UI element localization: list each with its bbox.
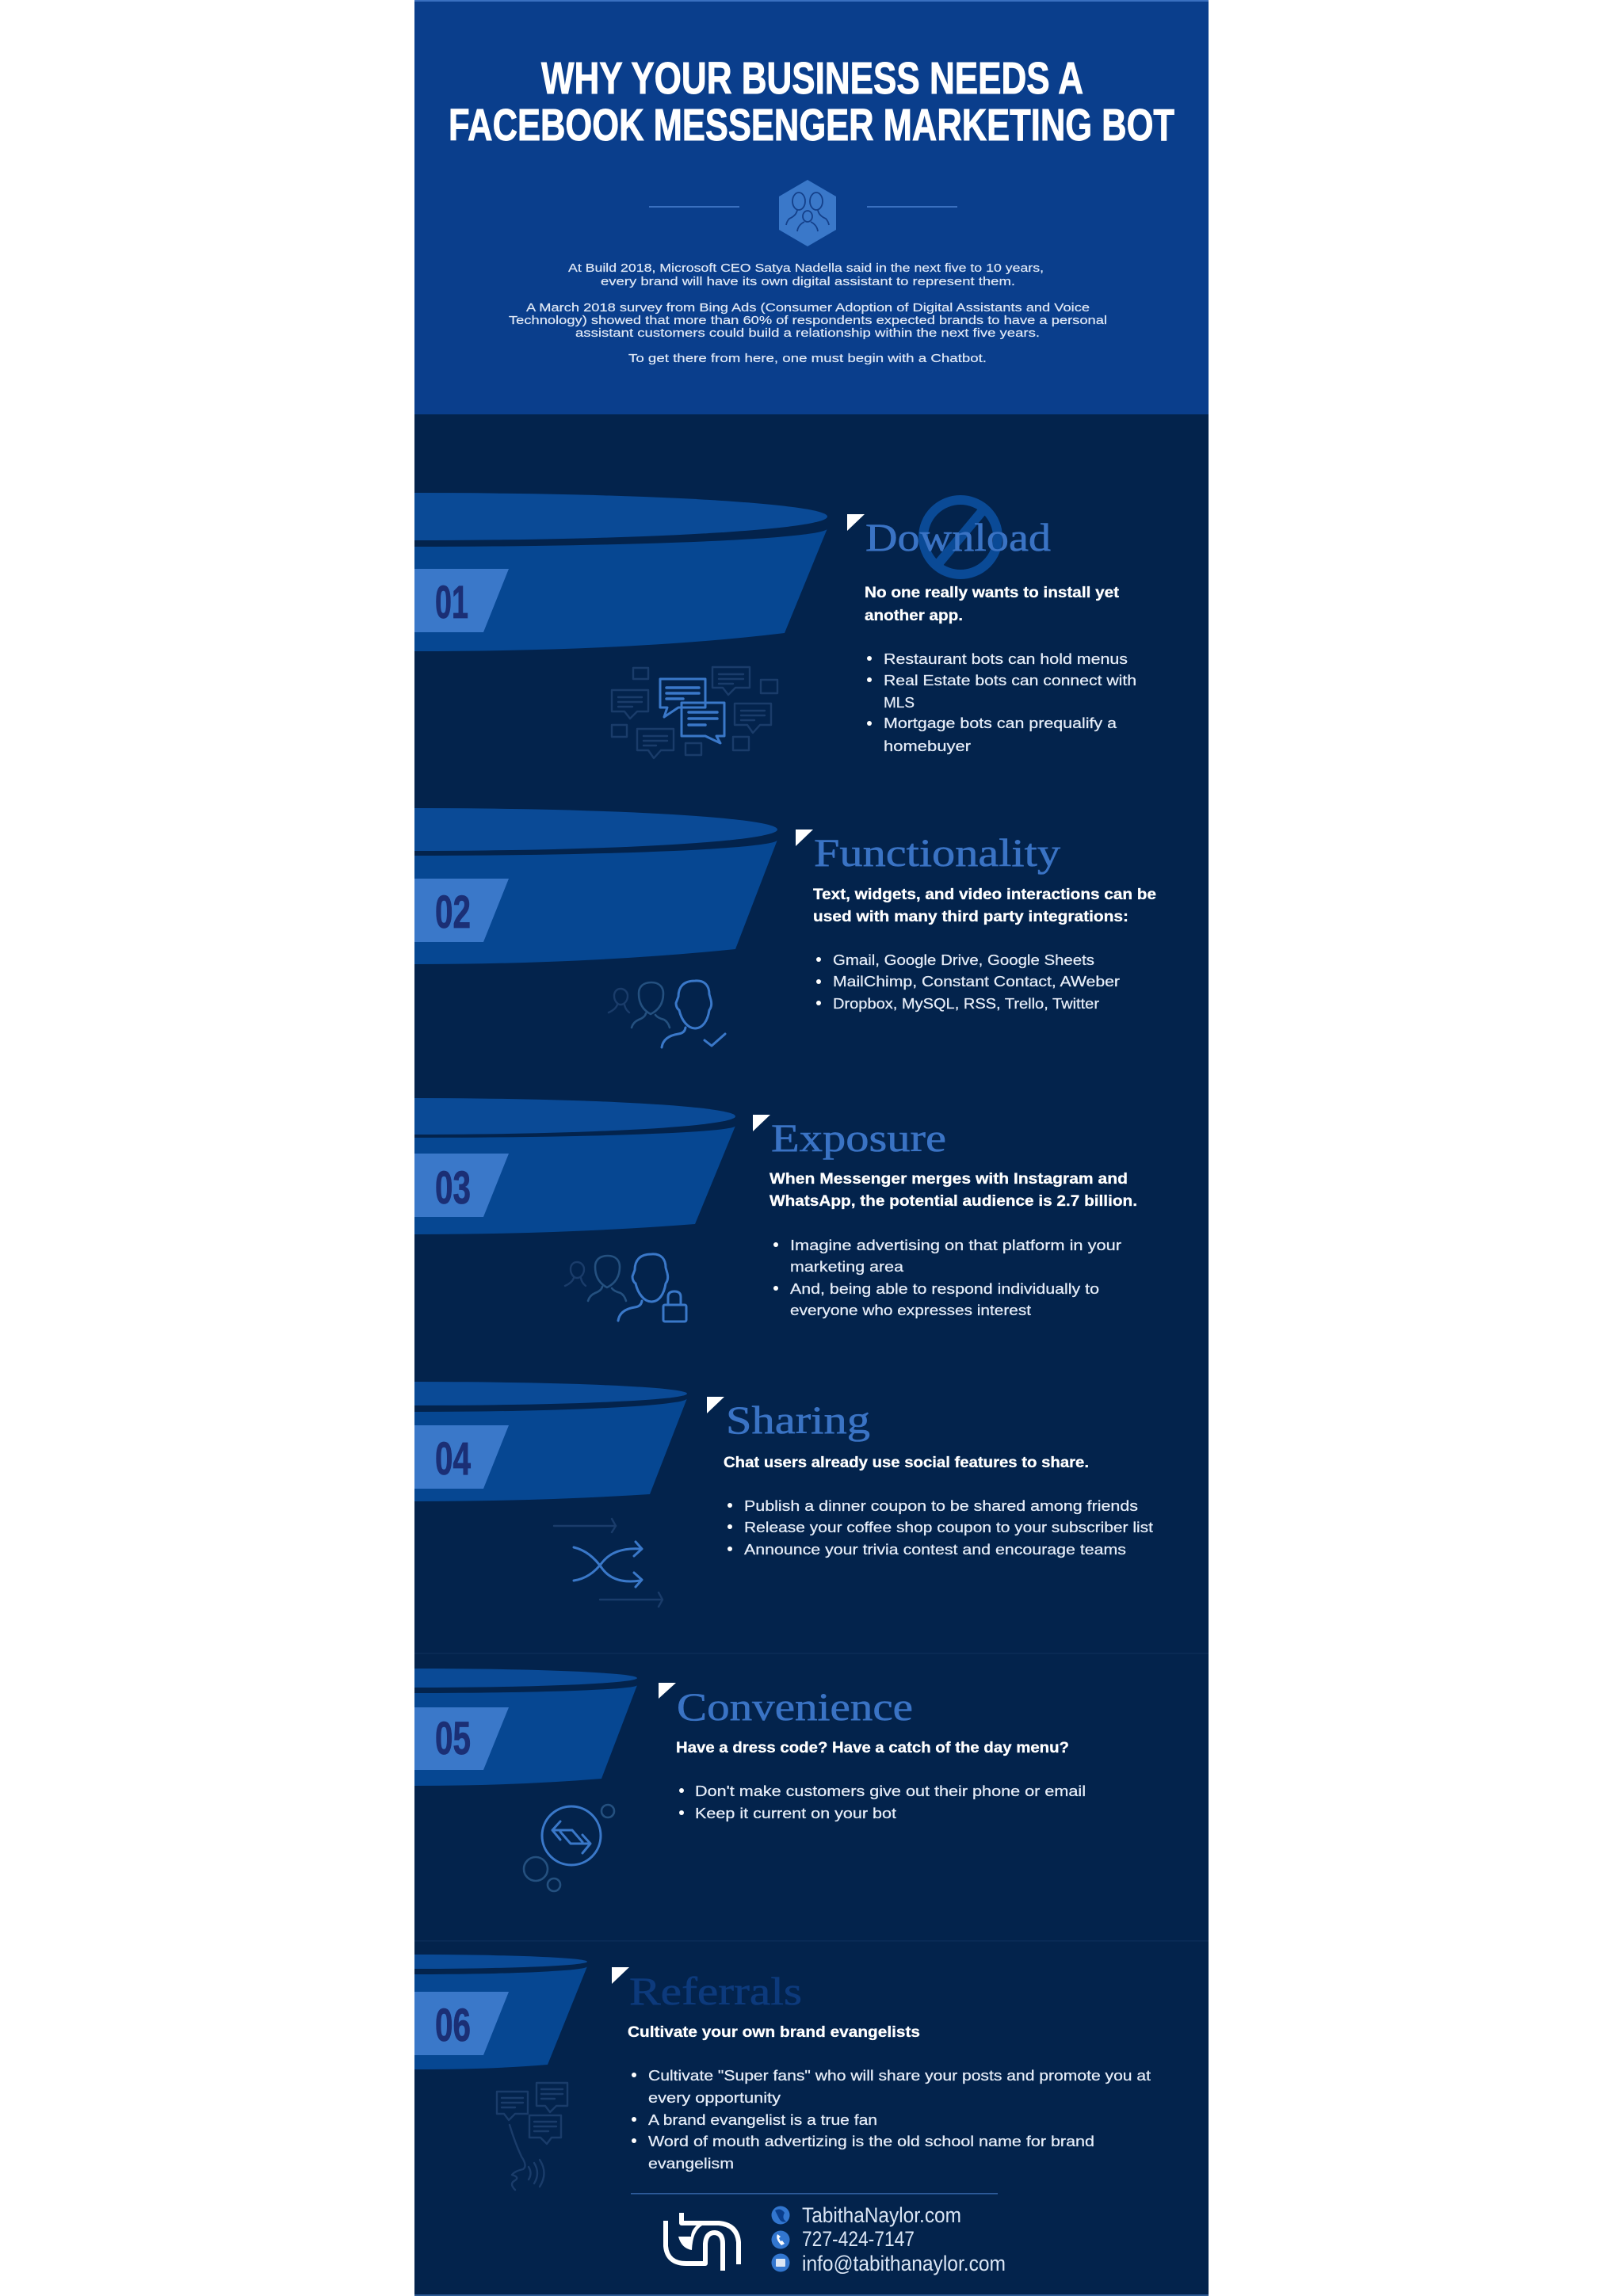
funnel tier 06: 06: [435, 2000, 471, 2051]
text block: No one really wants to install yet: [865, 584, 1120, 601]
text block: MailChimp, Constant Contact, AWeber: [833, 973, 1120, 990]
funnel tier 05: 05: [435, 1713, 471, 1764]
icon: no entry behind heading: [923, 500, 998, 574]
text block: Keep it current on your bot: [695, 1805, 896, 1821]
funnel tier 06: [414, 1955, 587, 2069]
text block: Publish a dinner coupon to be shared among friends: [744, 1497, 1138, 1514]
intro text: To get there from here, one must begin with a Chatbot.: [628, 352, 987, 365]
icon: hexagon with people: [649, 180, 957, 246]
heading: Referrals: Referrals: [629, 1969, 802, 2013]
text block: Release your coffee shop coupon to your subscriber list: [744, 1519, 1153, 1535]
text block: Word of mouth advertizing is the old school name for brand: [648, 2133, 1094, 2149]
divider: [631, 2193, 998, 2195]
icon: phone: [772, 2231, 789, 2248]
contact details: info@tabithanaylor.com: [802, 2252, 1006, 2275]
panel: 04 Sharing: [414, 1382, 1153, 1607]
icon: exchange circle: [524, 1805, 614, 1891]
funnel tier 03: [414, 1098, 735, 1234]
text block: Mortgage bots can prequalify a: [884, 715, 1117, 731]
text block: Announce your trivia contest and encourage teams: [744, 1541, 1126, 1558]
intro text: At Build 2018, Microsoft CEO Satya Nadella said in the next five to 10 years,: [568, 261, 1044, 275]
funnel tier 04: 04: [435, 1433, 471, 1485]
title: [449, 53, 1174, 151]
heading: Functionality: Functionality: [814, 830, 1060, 875]
icon: mail: [772, 2253, 789, 2272]
text block: marketing area: [790, 1258, 904, 1275]
intro text: [509, 261, 1107, 365]
panel: 06 Referrals: [414, 1955, 1151, 2275]
text block: Dropbox, MySQL, RSS, Trello, Twitter: [833, 995, 1099, 1012]
text block: [628, 2023, 1151, 2172]
text block: Text, widgets, and video interactions can be: [813, 886, 1156, 903]
text block: [724, 1454, 1153, 1558]
text block: And, being able to respond individually to: [790, 1280, 1099, 1297]
icon: chat bubbles: [612, 667, 777, 758]
text block: another app.: [865, 607, 963, 624]
text block: homebuyer: [884, 738, 971, 754]
text block: [676, 1739, 1086, 1821]
text block: When Messenger merges with Instagram and: [769, 1170, 1128, 1188]
heading: Convenience: Convenience: [677, 1684, 913, 1729]
funnel tier 02: [414, 808, 777, 964]
text block: [813, 886, 1156, 1012]
panel: 01 Download: [414, 493, 1136, 758]
intro text: A March 2018 survey from Bing Ads (Consumer Adoption of Digital Assistants and Voice: [526, 301, 1090, 315]
icon: shuffle arrows: [554, 1519, 663, 1607]
text block: evangelism: [648, 2155, 734, 2172]
funnel tier 05: [414, 1669, 637, 1786]
intro text: assistant customers could build a relationship within the next five years.: [575, 326, 1040, 340]
text block: Cultivate your own brand evangelists: [628, 2023, 920, 2041]
intro text: Technology) showed that more than 60% of respondents expected brands to have a personal: [509, 314, 1107, 327]
text block: WhatsApp, the potential audience is 2.7 billion.: [769, 1192, 1137, 1210]
heading: Download: Download: [865, 515, 1051, 559]
panel: header: [414, 0, 1209, 414]
icon: people with check: [609, 981, 725, 1047]
text block: A brand evangelist is a true fan: [648, 2111, 877, 2128]
funnel tier 01: 01: [435, 577, 468, 628]
funnel tier 02: 02: [435, 887, 471, 938]
text block: Don't make customers give out their phone or email: [695, 1783, 1086, 1799]
heading: Exposure: Exposure: [771, 1116, 946, 1160]
text block: Real Estate bots can connect with: [884, 672, 1136, 688]
text block: [769, 1170, 1137, 1318]
contact details: 727-424-7147: [802, 2227, 915, 2251]
text block: Chat users already use social features to share.: [724, 1454, 1089, 1471]
text block: MLS: [884, 694, 915, 711]
text block: every opportunity: [648, 2089, 781, 2106]
funnel tier 03: 03: [435, 1162, 471, 1214]
panel: 02 Functionality: [414, 808, 1156, 1047]
text block: Gmail, Google Drive, Google Sheets: [833, 952, 1094, 968]
panel: 03 Exposure: [414, 1098, 1137, 1322]
funnel tier 01: [414, 493, 827, 651]
contact details: [772, 2203, 1006, 2275]
icon: globe: [772, 2206, 789, 2225]
text block: Imagine advertising on that platform in your: [790, 1237, 1121, 1253]
text block: Have a dress code? Have a catch of the day menu?: [676, 1739, 1069, 1756]
contact details: TabithaNaylor.com: [802, 2203, 961, 2227]
logo: [666, 2213, 739, 2271]
panel: 05 Convenience: [414, 1669, 1086, 1891]
text block: Restaurant bots can hold menus: [884, 650, 1128, 667]
icon: people with lock: [565, 1254, 686, 1322]
icon: speech from mouth: [497, 2083, 567, 2190]
text block: used with many third party integrations:: [813, 908, 1128, 925]
heading: Sharing: Sharing: [726, 1398, 870, 1442]
text block: everyone who expresses interest: [790, 1302, 1031, 1318]
text block: Cultivate "Super fans" who will share your posts and promote you at: [648, 2067, 1151, 2084]
text block: [865, 584, 1136, 754]
intro text: every brand will have its own digital assistant to represent them.: [601, 275, 1015, 288]
title: FACEBOOK MESSENGER MARKETING BOT: [449, 100, 1174, 151]
funnel tier 04: [414, 1382, 687, 1501]
title: WHY YOUR BUSINESS NEEDS A: [541, 53, 1083, 104]
